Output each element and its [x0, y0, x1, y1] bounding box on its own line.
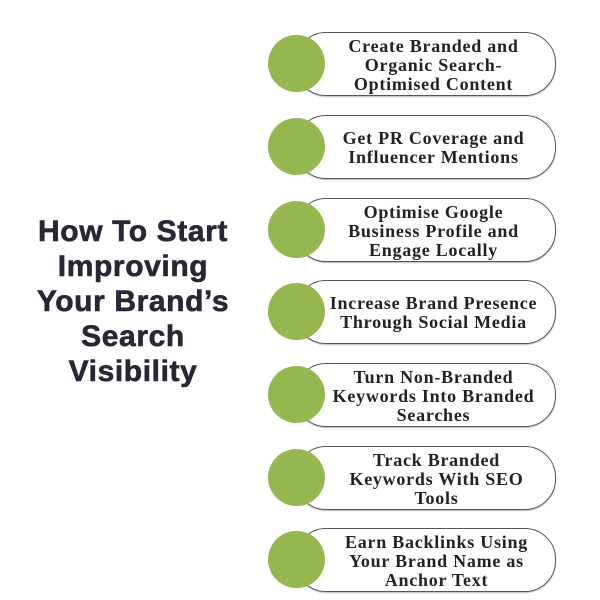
item 7: backlinks: [268, 528, 556, 594]
item 3: Google Business Profile: Optimise Google: [364, 202, 503, 222]
item 5: non-branded keywords: Keywords Into Branded: [333, 386, 534, 406]
item 6: SEO tools: Track Branded: [373, 450, 500, 470]
item 1: branded content: Optimised Content: [354, 74, 513, 94]
item 7: backlinks: Earn Backlinks Using: [345, 532, 528, 552]
item 1: branded content: Organic Search-: [365, 55, 502, 75]
item 5: non-branded keywords: Turn Non-Branded: [354, 367, 513, 387]
item 2: PR coverage: [268, 115, 556, 180]
item 1: branded content: Create Branded and: [348, 36, 519, 56]
title: [36, 215, 229, 388]
title: Visibility: [69, 355, 197, 388]
item 5: non-branded keywords: Searches: [397, 405, 470, 425]
item 2: PR coverage: Get PR Coverage and: [343, 128, 524, 148]
item 1: branded content: [268, 32, 556, 98]
item 6: SEO tools: [268, 446, 556, 512]
item 6: SEO tools: Tools: [414, 488, 459, 508]
item 5: non-branded keywords: [268, 363, 556, 428]
title: Improving: [58, 250, 208, 283]
item 4: social media: Increase Brand Presence: [330, 293, 537, 313]
item 3: Google Business Profile: Engage Locally: [369, 240, 498, 260]
item 3: Google Business Profile: Business Profile and: [348, 221, 519, 241]
item 4: social media: [268, 280, 556, 346]
item 7: backlinks: Your Brand Name as: [349, 551, 524, 571]
title: Search: [81, 320, 185, 353]
item 2: PR coverage: Influencer Mentions: [348, 147, 519, 167]
title: How To Start: [38, 215, 228, 248]
item 3: Google Business Profile: [268, 198, 556, 264]
item 6: SEO tools: Keywords With SEO: [349, 469, 524, 489]
item 7: backlinks: Anchor Text: [385, 570, 488, 590]
title: Your Brand’s: [37, 285, 229, 318]
item 4: social media: Through Social Media: [340, 312, 527, 332]
